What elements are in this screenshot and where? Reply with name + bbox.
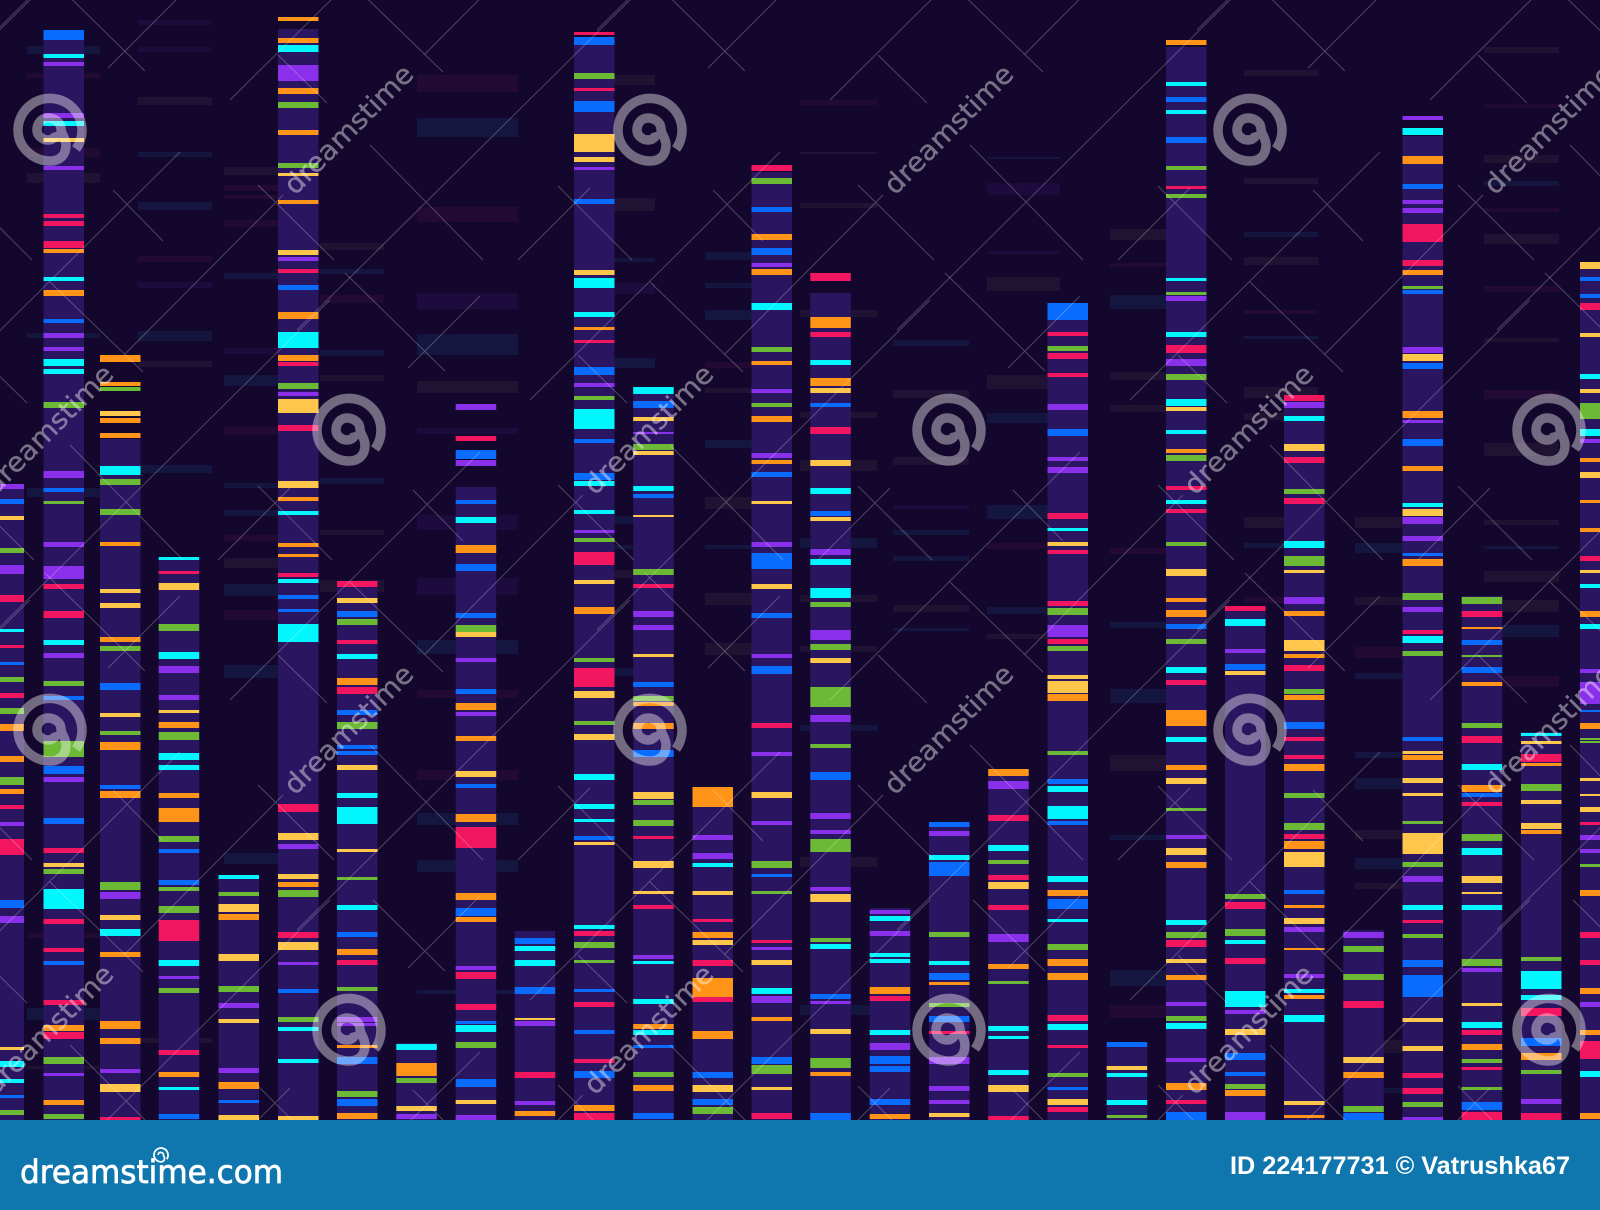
column 20 bbox=[1166, 40, 1206, 1120]
column 6 bbox=[337, 581, 378, 1120]
watermark text: dreamstime bbox=[578, 359, 720, 501]
watermark text: dreamstime bbox=[578, 959, 720, 1101]
column 19 bbox=[1107, 1042, 1147, 1120]
column 27 bbox=[1580, 262, 1600, 1120]
column 26 bbox=[1521, 732, 1562, 1120]
watermark text: dreamstime bbox=[878, 59, 1020, 201]
column 23 bbox=[1343, 930, 1384, 1120]
column 16 bbox=[929, 822, 970, 1120]
column 7 bbox=[396, 1043, 437, 1120]
column 3 bbox=[159, 557, 199, 1120]
column 12 bbox=[692, 787, 733, 1120]
watermark text: dreamstime bbox=[878, 659, 1020, 801]
column 17 bbox=[988, 769, 1029, 1120]
column 15 bbox=[870, 908, 910, 1120]
column 24 bbox=[1402, 116, 1443, 1120]
column 10 bbox=[574, 32, 614, 1120]
column 21 bbox=[1225, 606, 1266, 1120]
column 14 bbox=[810, 273, 851, 1120]
column 25 bbox=[1462, 596, 1502, 1120]
column 5 bbox=[278, 17, 318, 1120]
watermark text: dreamstime bbox=[1178, 359, 1320, 501]
column 18 bbox=[1048, 303, 1088, 1120]
column 22 bbox=[1284, 395, 1324, 1120]
footer image id and author credit: ID 224177731 © Vatrushka67 bbox=[1230, 1152, 1570, 1180]
watermark text: dreamstime bbox=[278, 59, 420, 201]
watermark spirals bbox=[18, 98, 1581, 1061]
watermark text: dreamstime bbox=[278, 659, 420, 801]
column 2 bbox=[100, 355, 140, 1120]
watermark text: dreamstime bbox=[1178, 959, 1320, 1101]
column 0 bbox=[0, 484, 24, 1120]
column 4 bbox=[218, 875, 259, 1120]
column 11 bbox=[633, 387, 674, 1120]
footer logo: dreamstime.com bbox=[20, 1153, 283, 1191]
footer bar bbox=[0, 1120, 1600, 1210]
column 13 bbox=[752, 165, 792, 1120]
column 8 bbox=[456, 404, 496, 1120]
column 1 bbox=[44, 30, 84, 1120]
column 9 bbox=[515, 931, 555, 1120]
